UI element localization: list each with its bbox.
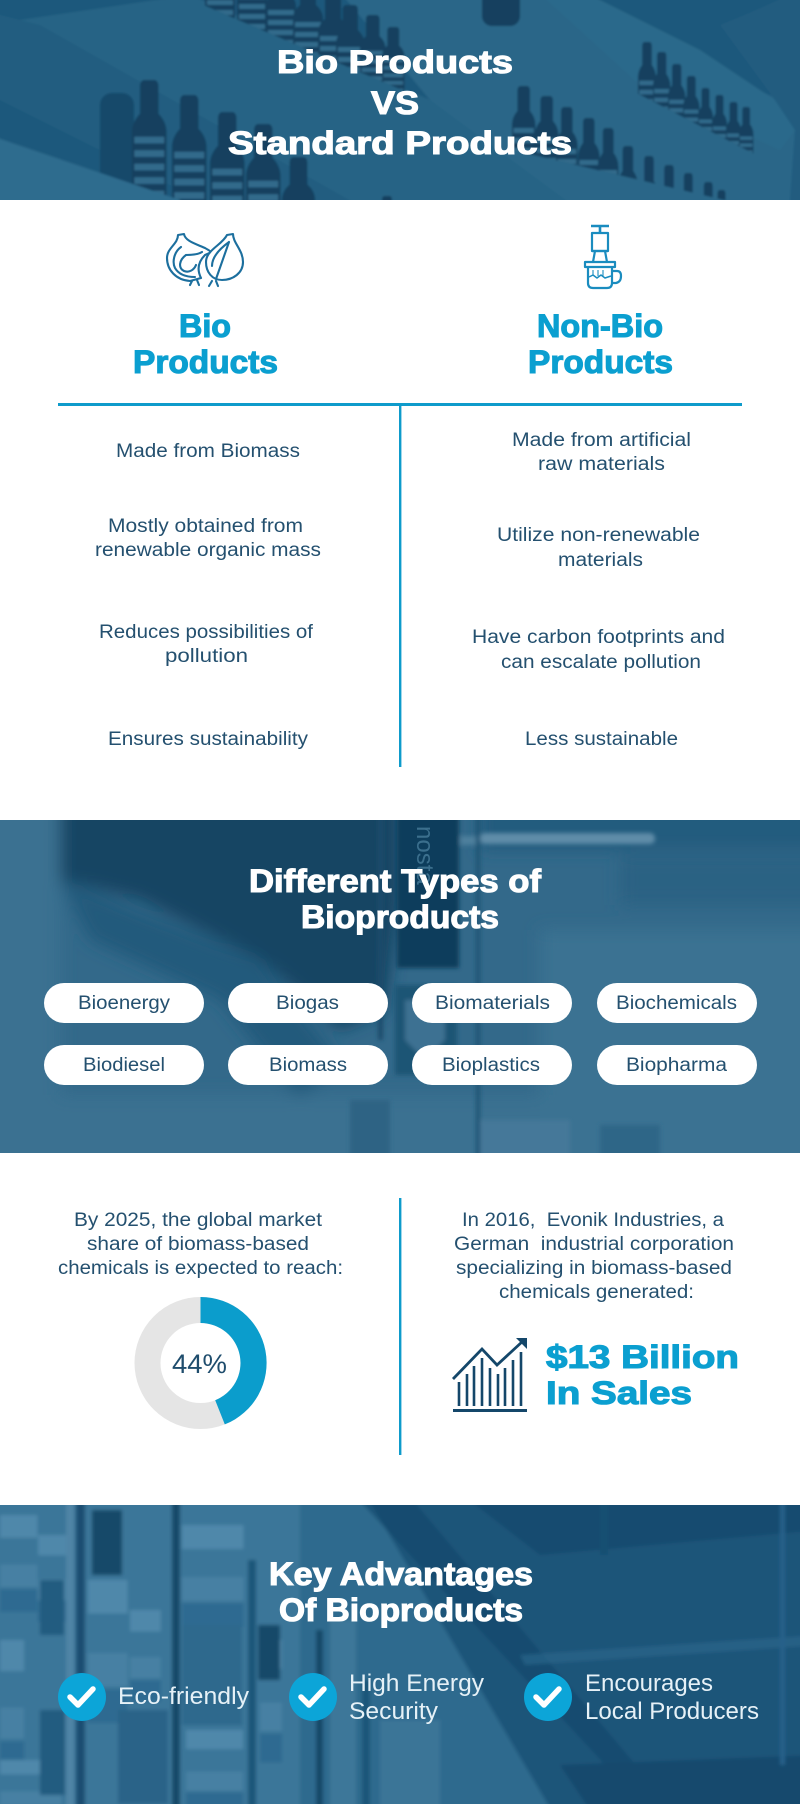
item: Encourages Local Producers: Encourages [585,1670,713,1697]
chart: 44 percent donut: 44% [172,1349,227,1379]
photo: blurred warehouse background: nosta [411,826,438,885]
callout: 13 billion in sales: $13 Billion [546,1339,739,1375]
text: Evonik sales: In 2016, Evonik Industries, a [462,1210,724,1231]
title: VS [371,85,419,121]
text: market share forecast: By 2025, the global market [74,1210,323,1231]
heading: bio products [133,308,278,380]
item: High Energy Security [289,1670,484,1725]
item: High Energy Security: Security [349,1698,438,1725]
pill: Biomaterials: Biomaterials [435,993,550,1014]
heading: key advantages: Key Advantages [269,1556,533,1592]
list: non-bio product traits: Have carbon footprints and [472,627,725,648]
photo: bottles on shelves background [0,0,800,200]
item: Eco-friendly: Eco-friendly [118,1683,249,1710]
list: bio product traits: Ensures sustainability [108,729,309,750]
icon: check [58,1673,106,1721]
pill: Biochemicals [597,983,757,1023]
text: Evonik sales: specializing in biomass-based [456,1258,732,1279]
icon: check [524,1673,572,1721]
text: Evonik sales: chemicals generated: [499,1282,694,1303]
callout: 13 billion in sales: In Sales [546,1375,692,1411]
pill: Biodiesel: Biodiesel [83,1055,165,1076]
column: non-bio products [472,226,725,750]
photo: store shelves background [0,1485,800,1804]
heading: different types: Bioproducts [301,899,499,935]
list: bio product traits: renewable organic mass [95,540,321,561]
heading: different types [249,863,541,935]
pill: Bioenergy: Bioenergy [78,993,171,1014]
list: bio product traits: pollution [165,646,248,667]
callout: 13 billion in sales [546,1339,739,1411]
pill: Biodiesel [44,1045,204,1085]
item: Encourages Local Producers [524,1670,759,1725]
icon: rising bar chart [453,1338,527,1410]
list: non-bio product traits: Made from artificial [512,430,691,451]
pill: Bioenergy [44,983,204,1023]
list: non-bio product traits: Utilize non-renewable [497,525,700,546]
item: High Energy Security: High Energy [349,1670,484,1697]
panel: hero header [0,0,800,200]
column: bio products [95,234,321,750]
pill: Biomaterials [412,983,572,1023]
heading: bio products: Bio [179,308,231,344]
list: bio product traits: Made from Biomass [116,441,300,462]
pill: Biomass [228,1045,388,1085]
item: Eco-friendly [58,1673,249,1721]
text: market share forecast: chemicals is expected to reach: [58,1258,343,1279]
title: Standard Products [228,125,572,161]
text: Evonik sales: German industrial corporation [454,1234,734,1255]
pill: Bioplastics [412,1045,572,1085]
heading: non-bio products: Products [528,344,673,380]
text: market share forecast [58,1210,343,1279]
list: bio product traits: Mostly obtained from [108,516,303,537]
heading: different types: Different Types of [249,863,541,899]
list: non-bio product traits [472,430,725,750]
list: non-bio product traits: Less sustainable [525,729,678,750]
chart: 44 percent donut [148,1297,267,1424]
heading: key advantages: Of Bioproducts [279,1592,523,1628]
text: Evonik sales [454,1210,734,1303]
title: Bio Products [277,44,513,80]
text: market share forecast: share of biomass-based [87,1234,309,1255]
pill: Bioplastics: Bioplastics [442,1055,540,1076]
heading: non-bio products: Non-Bio [537,308,663,344]
pill: Biomass: Biomass [269,1055,347,1076]
panel: different types of bioproducts [0,820,800,1153]
pill: Biogas [228,983,388,1023]
item: Encourages Local Producers: Local Producers [585,1698,759,1725]
pill: Biopharma: Biopharma [626,1055,727,1076]
pill: Biogas: Biogas [276,993,339,1014]
title [228,44,572,161]
pill: Biopharma [597,1045,757,1085]
list: bio product traits: Reduces possibilities of [99,622,314,643]
icon: check [289,1673,337,1721]
heading: key advantages [269,1556,533,1628]
list: non-bio product traits: materials [558,550,643,571]
heading: non-bio products [528,308,673,380]
photo: blurred warehouse background [0,820,800,1153]
icon: coffee press [585,226,621,288]
pill: Biochemicals: Biochemicals [616,993,737,1014]
panel: key advantages [0,1485,800,1804]
list: non-bio product traits: can escalate pollution [501,652,701,673]
icon: onions [167,234,243,286]
panel: market statistics [58,1198,739,1455]
list: bio product traits [95,441,321,750]
panel: comparison table [58,226,742,767]
list: non-bio product traits: raw materials [538,454,665,475]
heading: bio products: Products [133,344,278,380]
